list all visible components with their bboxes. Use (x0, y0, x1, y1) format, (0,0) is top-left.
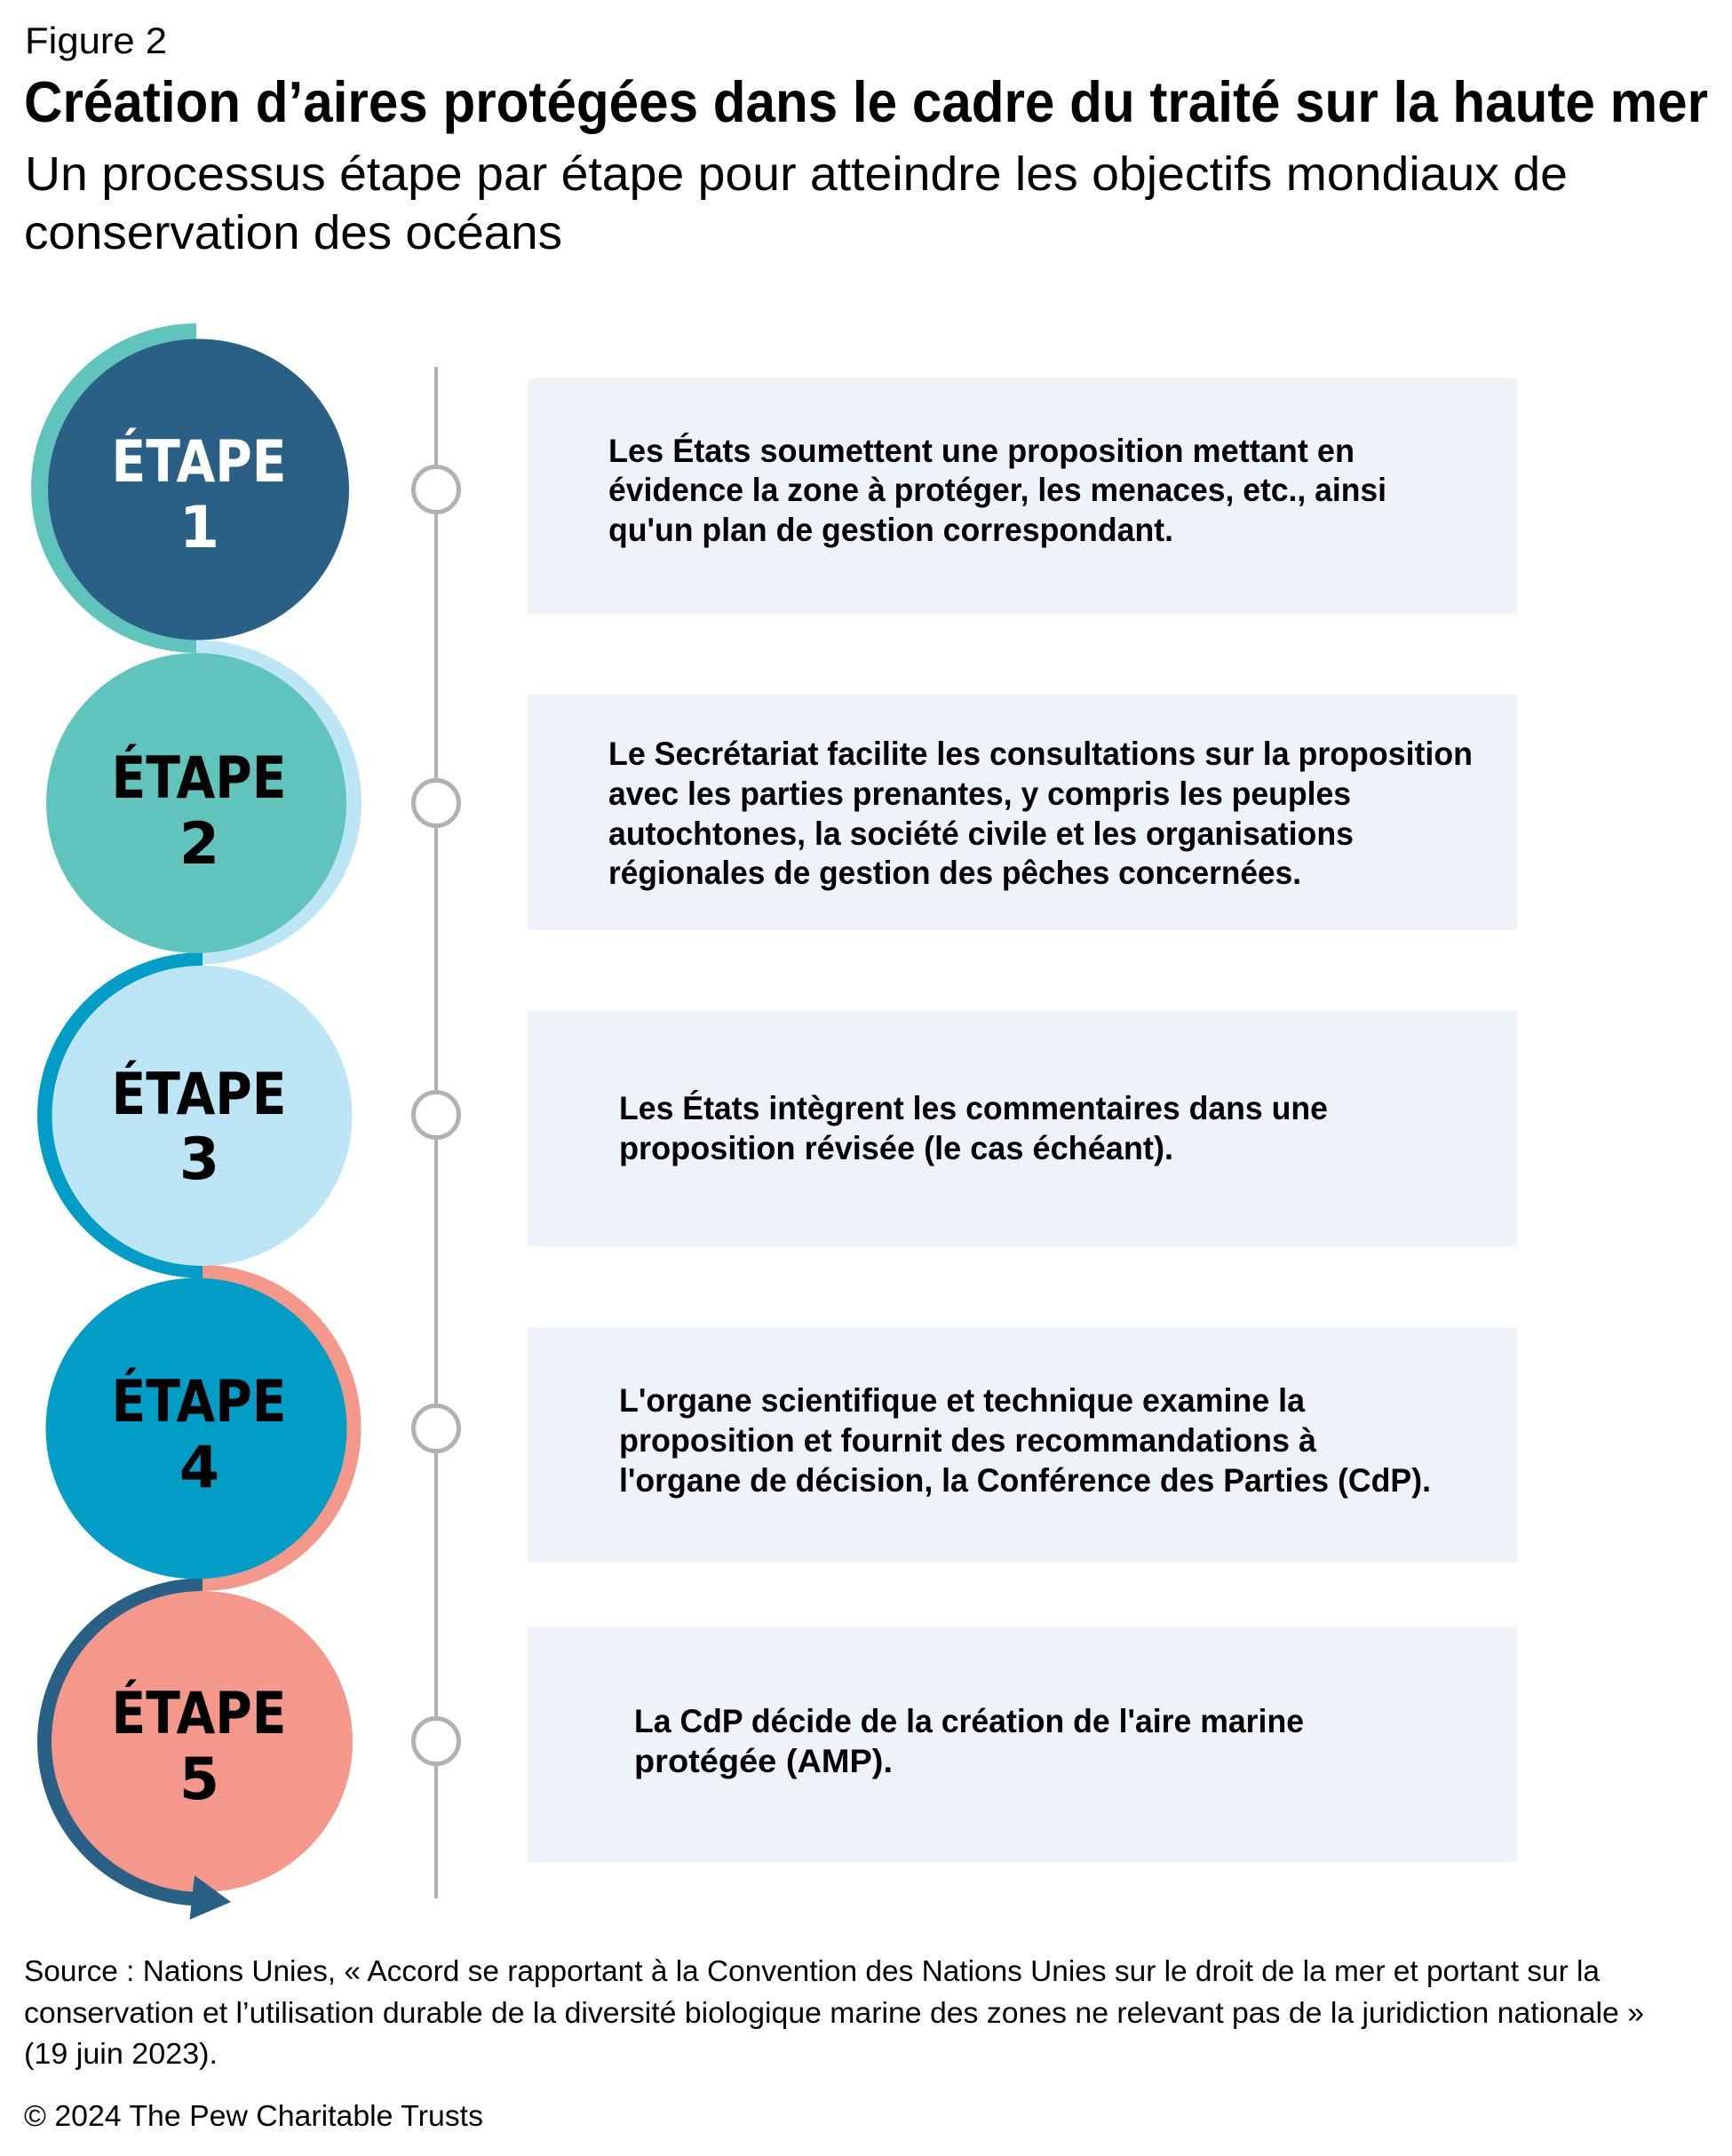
panel: step 1 text: qu'un plan de gestion correspondant. (608, 512, 1173, 548)
panel: step 2 text: autochtones, la société civile et les organisations (608, 815, 1354, 852)
arc: step 1 teal (31, 323, 196, 653)
panel: step 2 text: avec les parties prenantes, y compris les peuples (608, 776, 1351, 812)
step 4 circle: ÉTAPE (112, 1366, 286, 1436)
arc: step 5 navy (37, 1578, 203, 1906)
source note: (19 juin 2023). (24, 2037, 218, 2070)
arrow head (190, 1875, 231, 1920)
arc: step 3 blue (37, 952, 203, 1278)
panel: step 4 text: L'organe scientifique et technique examine la (619, 1382, 1305, 1419)
step 2 circle (46, 653, 346, 953)
panel: step 5 text: protégée (AMP). (634, 1743, 893, 1779)
step 1 circle (48, 339, 349, 640)
panel: step 1 text: Les États soumettent une proposition mettant en (608, 433, 1355, 469)
panel: step 4 text: l'organe de décision, la Conférence des Parties (CdP). (619, 1462, 1431, 1499)
panel: step 5 text (528, 1627, 1517, 1862)
source note: Source : Nations Unies, « Accord se rapportant à la Convention des Nations Unies sur le droit de la mer et portant sur la (24, 1954, 1601, 1987)
step 4 circle (46, 1277, 346, 1579)
subtitle: Un processus étape par étape pour atteindre les objectifs mondiaux de (25, 147, 1568, 201)
step 2 circle: ÉTAPE (112, 743, 286, 812)
panel: step 4 text (528, 1327, 1517, 1563)
panel: step 1 text: évidence la zone à protéger, les menaces, etc., ainsi (608, 472, 1386, 508)
step 1 circle: 1 (179, 495, 219, 561)
panel: step 3 text: Les États intègrent les commentaires dans une (619, 1090, 1328, 1126)
panel: step 3 text: proposition révisée (le cas échéant). (619, 1130, 1173, 1166)
step 3 circle: ÉTAPE (112, 1059, 286, 1128)
panel: step 1 text (528, 378, 1517, 614)
panel: step 5 text: La CdP décide de la création de l'aire marine (634, 1703, 1304, 1739)
step 1 circle: ÉTAPE (112, 426, 286, 496)
panel: step 4 text: proposition et fournit des recommandations à (619, 1422, 1316, 1459)
panel: step 2 text (528, 695, 1517, 930)
step 4 circle: 4 (179, 1435, 219, 1501)
step 2 circle: 2 (179, 811, 219, 878)
step 5 circle: 5 (179, 1746, 219, 1813)
subtitle: conservation des océans (24, 206, 562, 259)
subtitle (24, 147, 1568, 259)
step 5 circle (52, 1591, 353, 1892)
source note: conservation et l’utilisation durable de la diversité biologique marine des zones ne relevant pas de la juridiction nationale » (24, 1996, 1644, 2029)
panel: step 3 text (528, 1011, 1517, 1246)
source note (24, 1954, 1644, 2070)
timeline: vertical line with markers (414, 367, 458, 1898)
panel: step 2 text: Le Secrétariat facilite les consultations sur la proposition (608, 736, 1473, 772)
copyright: © 2024 The Pew Charitable Trusts (24, 2099, 483, 2132)
figure label: Figure 2 (25, 20, 167, 61)
arc: step 2 light blue (196, 640, 361, 965)
step 3 circle: 3 (179, 1126, 219, 1193)
step 3 circle (52, 966, 352, 1266)
step 5 circle: ÉTAPE (112, 1678, 286, 1747)
panel: step 2 text: régionales de gestion des pêches concernées. (608, 855, 1301, 891)
arc: step 4 salmon (203, 1265, 361, 1591)
